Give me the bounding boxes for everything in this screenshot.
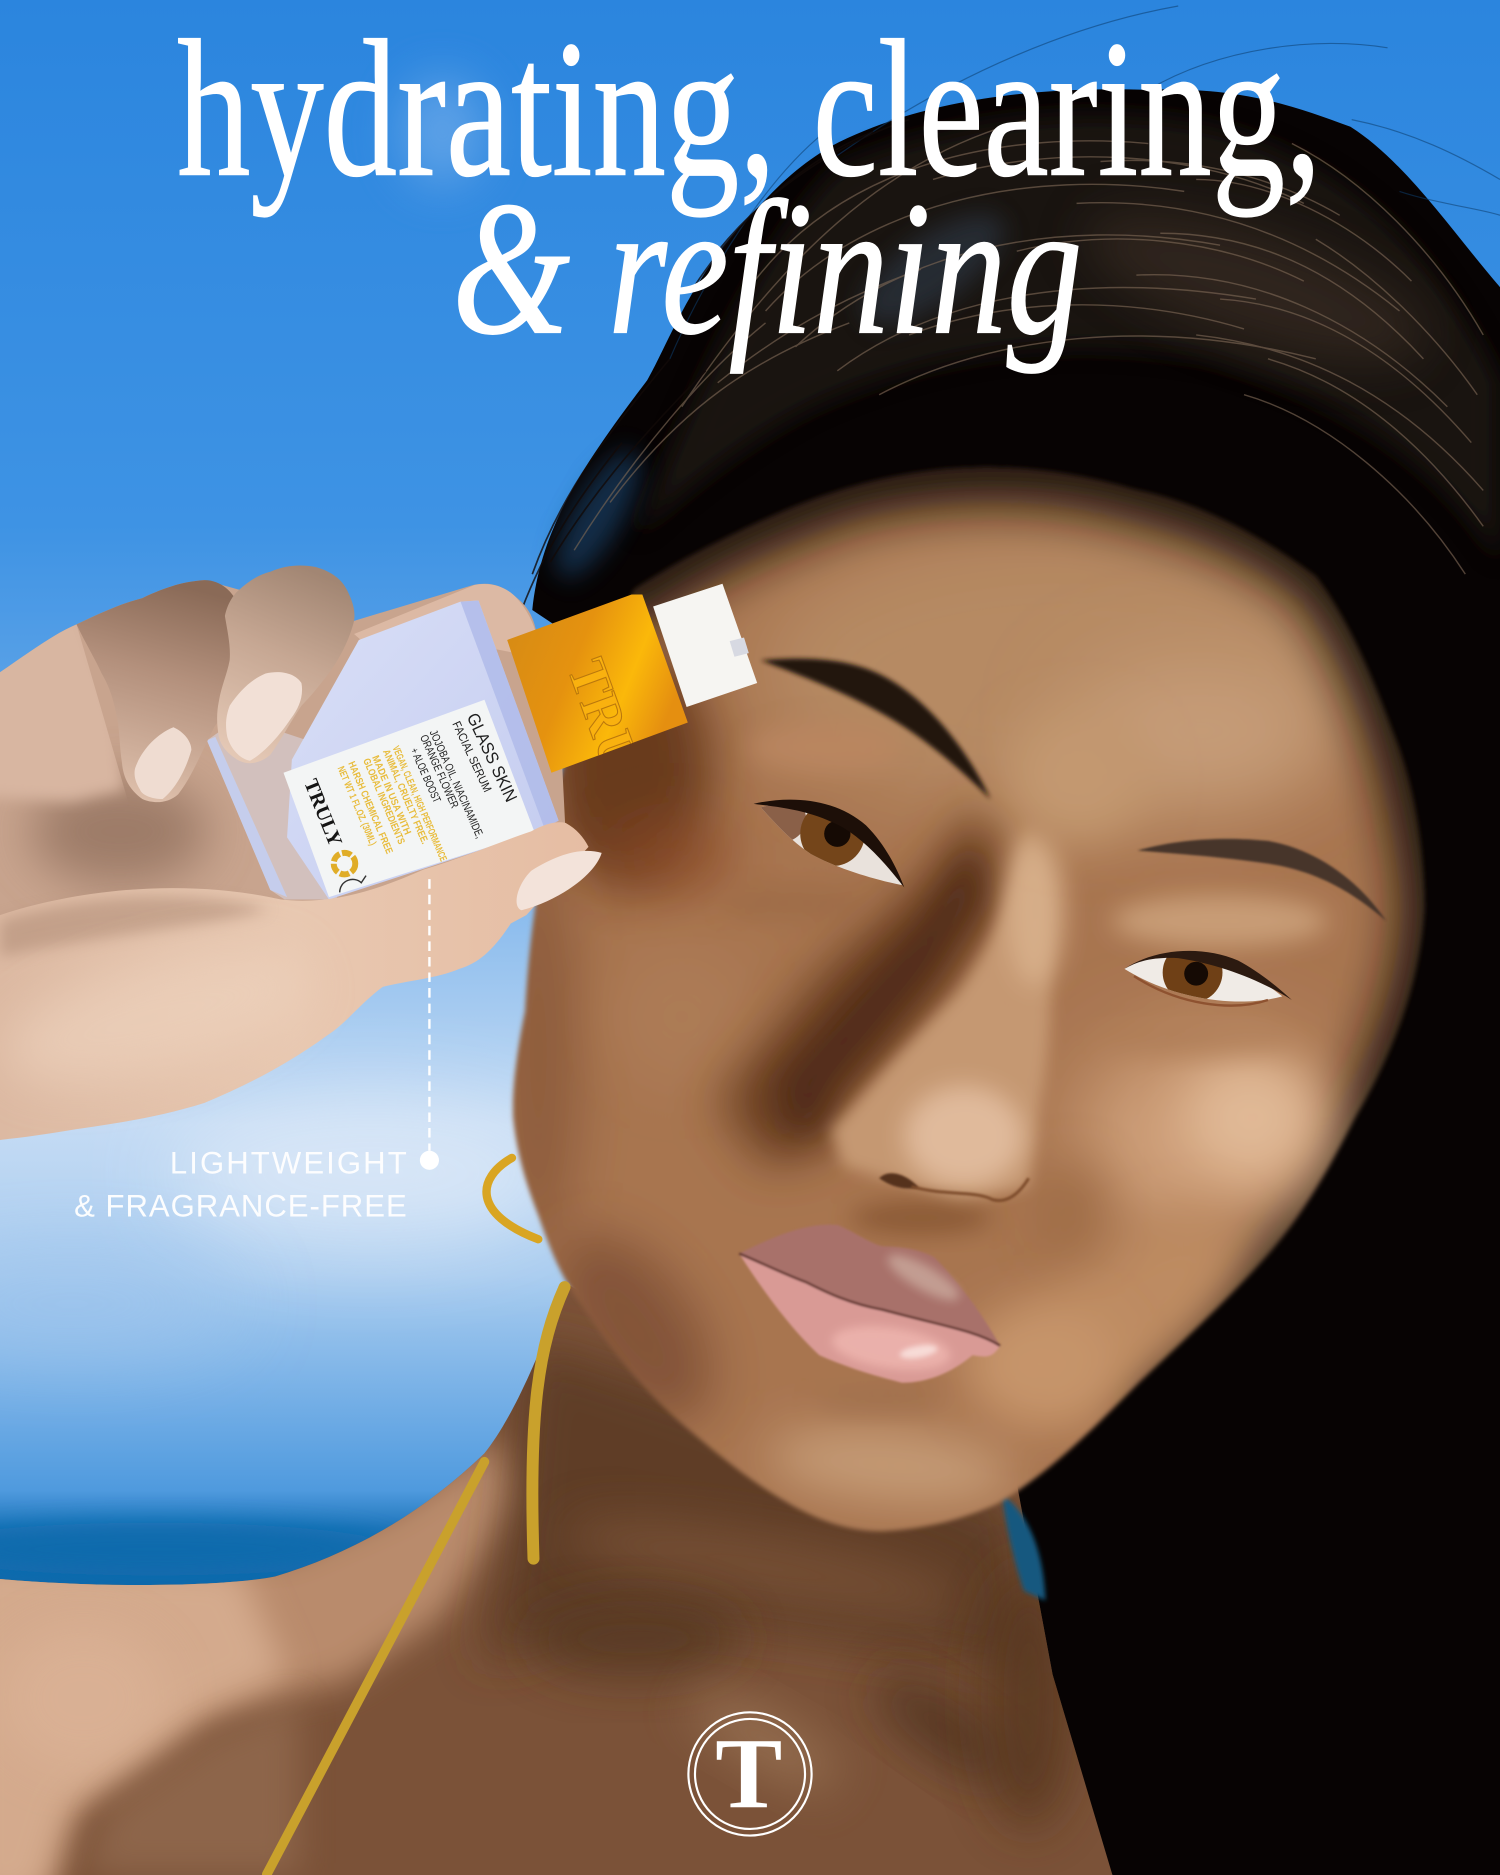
callout text: & FRAGRANCE-FREE — [74, 1189, 407, 1224]
label text: claims: ANIMAL, CRUELTY FREE. — [380, 748, 430, 846]
title — [177, 1, 1322, 375]
eyebrow left — [761, 659, 990, 799]
lower face tones — [849, 1201, 993, 1234]
label text: claims: GLOBAL INGREDIENTS — [360, 757, 406, 846]
eye socket tones — [996, 735, 1134, 856]
index finger nail — [135, 727, 191, 799]
label text: ingredients — [408, 728, 485, 840]
earring loop — [487, 1158, 538, 1239]
nose shadow band — [718, 801, 1005, 1166]
label text: claims: HARSH CHEMICAL FREE — [345, 760, 394, 856]
label text: claims: NET WT 1 FL.OZ. (30ML) — [335, 765, 378, 847]
face skin with shading — [496, 458, 1447, 1531]
thumb crease shadow — [0, 896, 269, 957]
lit shoulder — [0, 1435, 526, 1875]
strap: halter across shoulder — [267, 1462, 484, 1874]
thumb nail — [517, 851, 602, 910]
title: & refining — [452, 163, 1083, 375]
label text: claims: VEGAN, CLEAN, HIGH PERFORMANCE — [390, 744, 448, 863]
model hair — [522, 6, 1500, 1875]
left hand side — [0, 598, 124, 801]
left temple — [544, 646, 712, 885]
eye left — [754, 800, 904, 888]
palm highlight — [0, 925, 320, 1109]
logo: T monogram: T — [715, 1717, 782, 1829]
label text: ingredients: ORANGE FLOWER — [417, 733, 460, 810]
yellow neck cord and earring loop — [487, 1158, 565, 1559]
label text: facial serum: FACIAL SERUM — [449, 719, 494, 794]
middle finger — [217, 566, 354, 763]
icon: bunny outline — [340, 876, 366, 892]
label text: product name: GLASS SKIN — [463, 710, 521, 805]
nose highlight — [824, 884, 1056, 1203]
lavender serum body — [287, 600, 559, 900]
hairline and jaw rim shadow — [598, 458, 1447, 1417]
eyebrow right — [1138, 839, 1386, 921]
callout text — [74, 1145, 407, 1224]
model face — [496, 458, 1447, 1531]
neck shadow — [478, 1340, 1029, 1675]
label text: ingredients: JOJOBA OIL, NIACINAMIDE, — [427, 728, 485, 840]
middle finger nail — [226, 672, 302, 761]
bottle — [207, 584, 757, 900]
forehead tone — [754, 526, 1376, 813]
label text: ingredients: + ALOE BOOST — [408, 746, 442, 805]
hand front: fingers and thumb — [0, 566, 602, 1140]
gold cap — [507, 594, 688, 773]
callout text: LIGHTWEIGHT — [170, 1145, 407, 1180]
label text: claims — [335, 744, 448, 863]
thumb and palm — [0, 822, 589, 1140]
label text: brand: TRULY — [299, 776, 346, 850]
nostril and nose base — [879, 1173, 1029, 1201]
eye right — [1124, 950, 1292, 1007]
bottle label — [283, 700, 535, 897]
blue gap beside neck — [1002, 1495, 1045, 1600]
index finger — [77, 580, 243, 802]
logo: T monogram — [688, 1712, 812, 1836]
label text: claims: MADE IN USA WITH — [369, 754, 413, 837]
neck cord — [532, 1287, 565, 1559]
shoulder, neck and chest — [0, 1282, 1112, 1875]
icon: recycle — [334, 853, 355, 874]
callout leader line — [420, 879, 439, 1170]
transitional shoulder shadow — [93, 1714, 302, 1875]
hand back: palm behind bottle — [0, 580, 566, 957]
cheek tones — [512, 891, 592, 1241]
clear glass base — [207, 718, 337, 900]
lips — [739, 1225, 1000, 1383]
cap embossed text: TRUL — [556, 651, 665, 815]
pump dispenser — [653, 584, 757, 707]
